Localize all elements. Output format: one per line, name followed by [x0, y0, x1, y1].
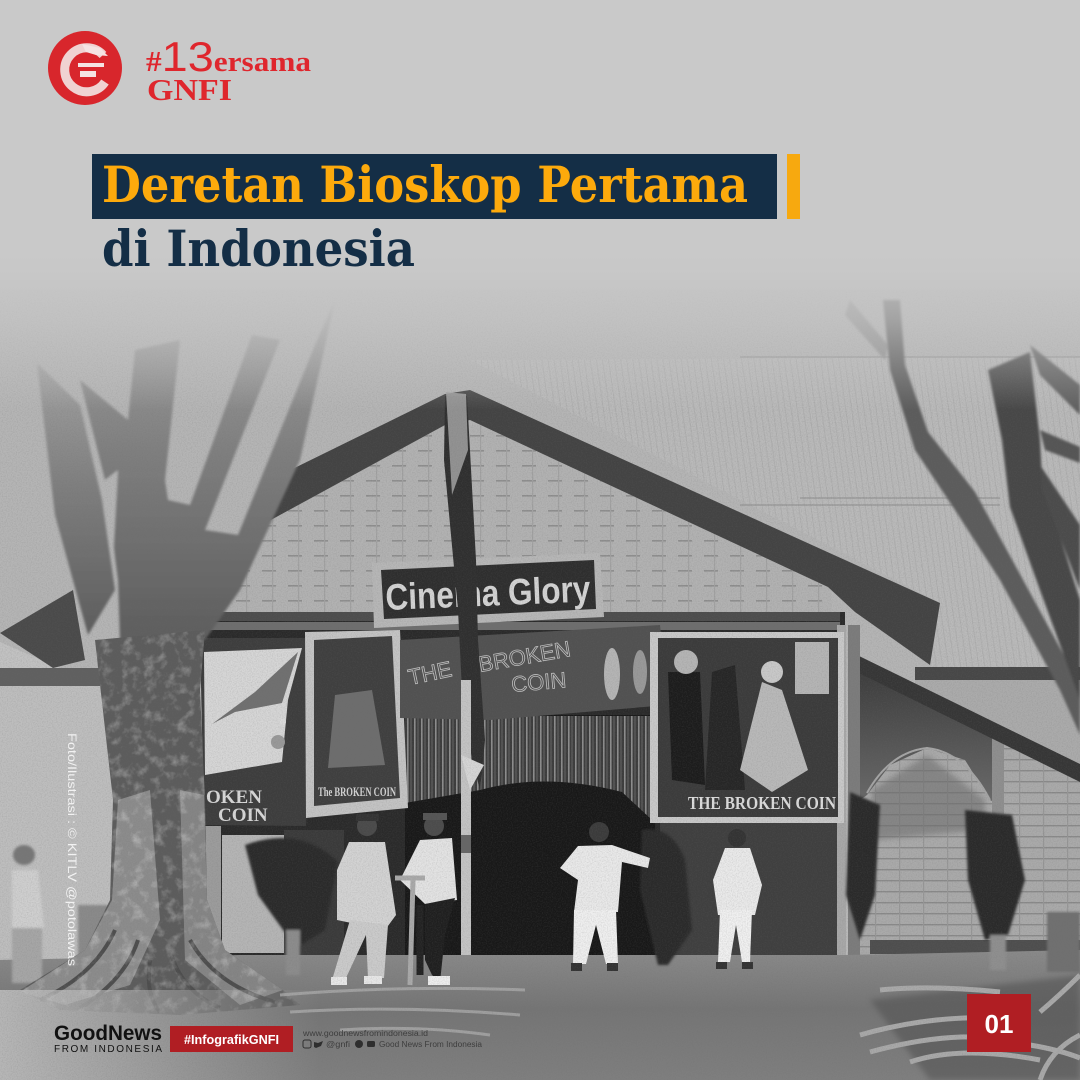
- film grain: [0, 290, 1080, 1080]
- campaign wordmark: #13ersama GNFI: #13ersama: [146, 33, 311, 80]
- footer logo: GoodNews from Indonesia: [54, 1022, 162, 1055]
- passer-by right: [1047, 912, 1080, 972]
- trunk mottling: [20, 630, 300, 1015]
- man pointing: [560, 822, 650, 971]
- thatch curtain: [405, 716, 652, 820]
- dark facade and doorway: [205, 612, 860, 965]
- sign: Cinema Glory: Cinema Glory: [385, 568, 592, 618]
- flag and pole: [444, 392, 485, 980]
- root debris: [280, 988, 525, 1035]
- man in suit: [331, 814, 396, 985]
- poster: right, couple: [650, 632, 844, 823]
- page number badge: [967, 994, 1031, 1052]
- website and social handles: www.goodnewsfromindonesia.id: [302, 1029, 428, 1038]
- website and social handles: @gnfi: [326, 1040, 350, 1049]
- page number badge: 01: [985, 1009, 1013, 1039]
- ground: [0, 950, 1080, 1080]
- poster: the broken coin, narrow: [305, 630, 408, 818]
- banner: the broken coin: BROKEN: [477, 636, 572, 677]
- left tree branches: [37, 300, 335, 640]
- poster: the broken coin, narrow: The BROKEN COIN: [318, 784, 396, 799]
- left and right side walls: [0, 667, 1080, 960]
- poster: left hand: COIN: [218, 805, 268, 826]
- campaign wordmark: #13ersama GNFI: [146, 33, 311, 107]
- banner: the broken coin: THE: [406, 656, 454, 690]
- website and social handles: Good News From Indonesia: [379, 1040, 483, 1049]
- logo: GNFI emblem: [48, 31, 122, 105]
- hashtag badge: #InfografikGNFI: [184, 1033, 279, 1047]
- sky and corrugated rear roof: [0, 280, 1080, 680]
- banner: the broken coin: [400, 625, 668, 720]
- banner: the broken coin: COIN: [510, 667, 567, 697]
- plants: [245, 792, 1025, 975]
- poster: left hand: OKEN: [206, 787, 262, 808]
- title bar: [92, 154, 777, 219]
- footer logo: GoodNews from Indonesia: FROM INDONESIA: [54, 1044, 162, 1055]
- photo: Cinema Glory building: [0, 280, 1080, 1080]
- poster: right, couple: THE BROKEN COIN: [688, 793, 836, 813]
- man standing: [713, 829, 762, 969]
- website and social handles: [302, 1029, 483, 1049]
- photo credit: Foto/Ilustrasi : © KITLV @potolawas: [65, 733, 79, 966]
- sign: Cinema Glory: [372, 553, 604, 628]
- title line 1: Deretan Bioskop Pertama: [102, 155, 748, 214]
- passer-by left: [12, 845, 108, 983]
- right trees: [845, 300, 1080, 735]
- title line 2: di Indonesia: [102, 219, 415, 278]
- bottom left haze: [0, 990, 320, 1080]
- left tree: [20, 300, 335, 1015]
- left tree trunk and roots: [20, 630, 300, 1015]
- man with bicycle: [395, 813, 457, 985]
- title accent bar: [787, 154, 800, 219]
- roof eaves: [0, 390, 1080, 782]
- footer logo: GoodNews from Indonesia: GoodNews: [54, 1022, 162, 1045]
- campaign wordmark: #13ersama GNFI: GNFI: [147, 72, 232, 107]
- hashtag badge: [170, 1026, 293, 1052]
- poster: left hand: [200, 638, 318, 826]
- gable wall: [215, 425, 832, 622]
- ground shadow and roots, right: [860, 975, 1080, 1080]
- top fade over photo: [0, 0, 1080, 410]
